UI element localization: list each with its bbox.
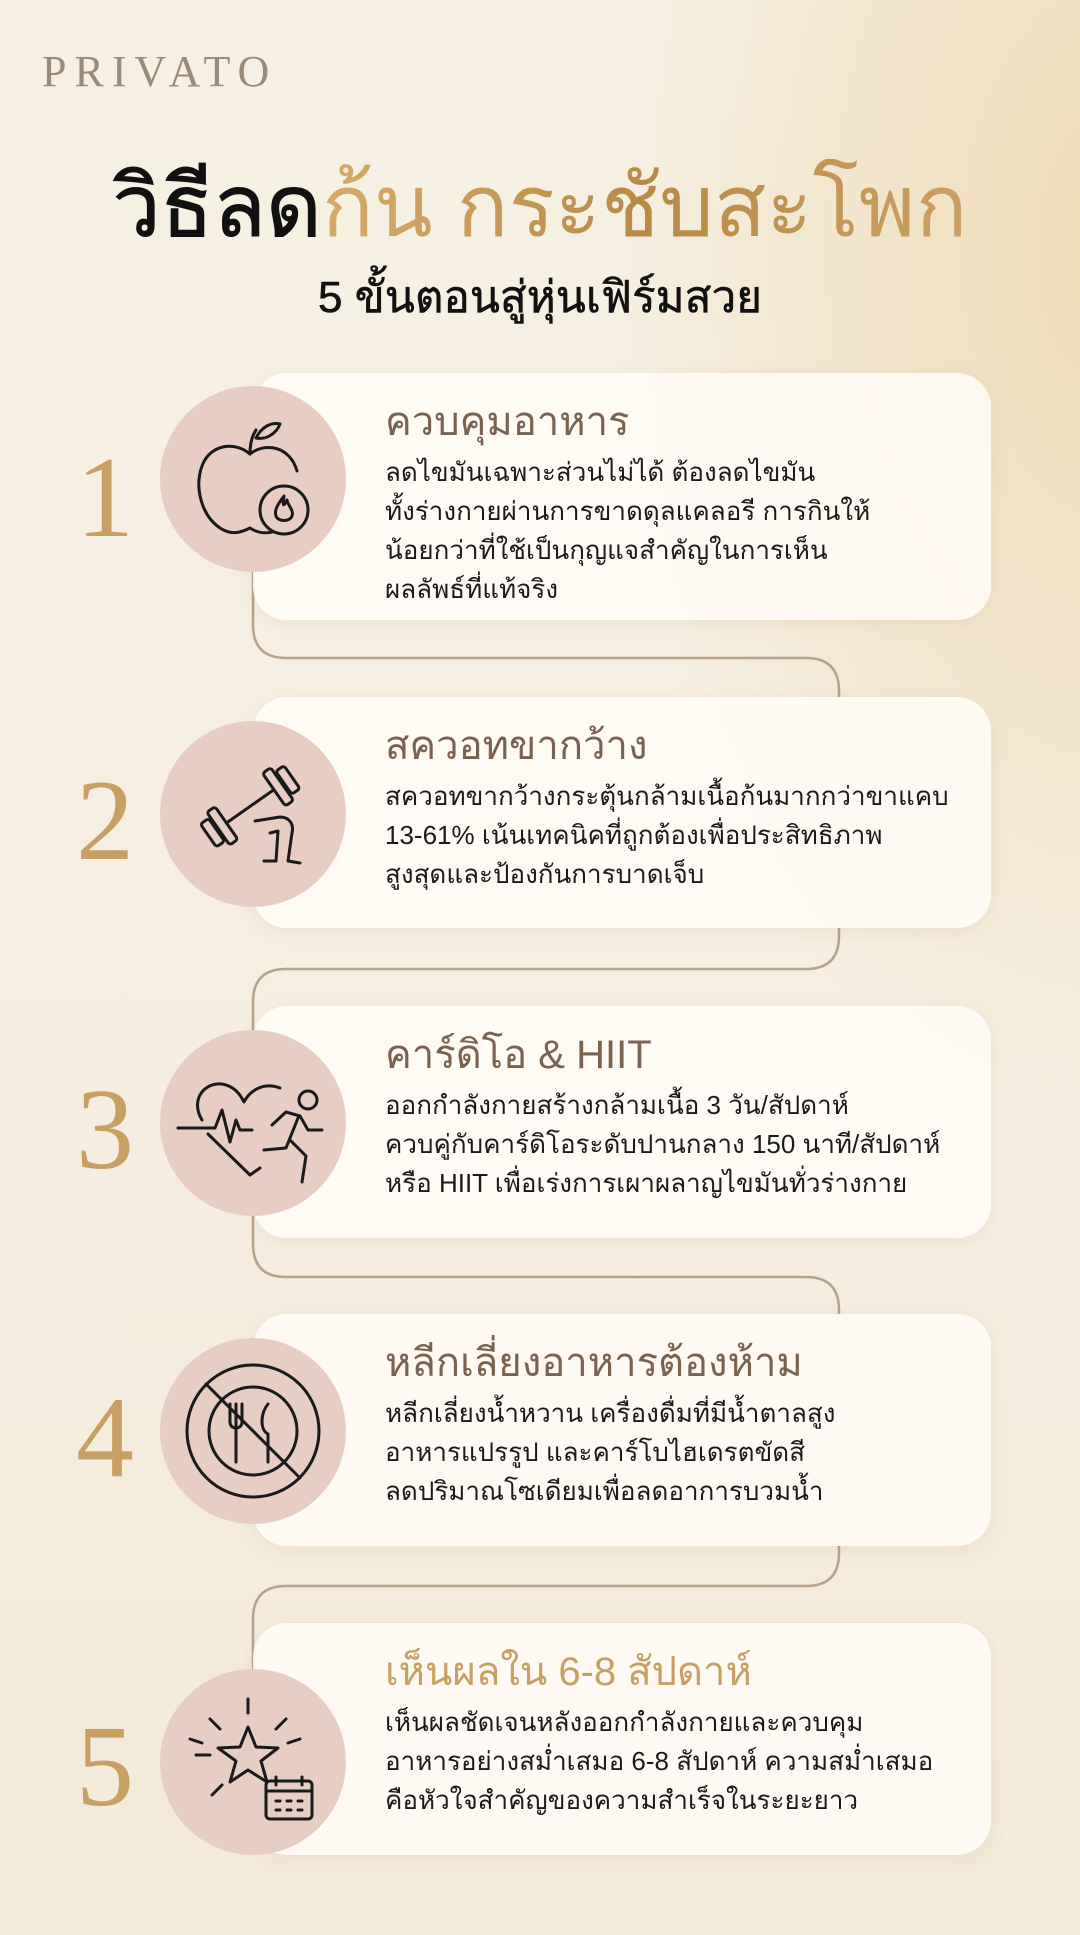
icon: heart with runner (160, 1030, 346, 1216)
panel: step 5: คือหัวใจสำคัญของความสำเร็จในระยะยาว (385, 1785, 858, 1815)
panel: step 1: ทั้งร่างกายผ่านการขาดดุลแคลอรี การกินให้ (385, 496, 870, 526)
panel: step 5: เห็นผลใน 6-8 สัปดาห์ (385, 1650, 752, 1694)
number 1: 1 (76, 434, 134, 562)
icon: apple with flame (160, 386, 346, 572)
panel: step 2 (253, 697, 991, 928)
panel: step 1: ลดไขมันเฉพาะส่วนไม่ได้ ต้องลดไขมัน (385, 457, 815, 487)
panel: step 4: หลีกเลี่ยงอาหารต้องห้าม (385, 1341, 803, 1385)
panel: step 3: คาร์ดิโอ & HIIT (385, 1033, 652, 1077)
panel: step 3: หรือ HIIT เพื่อเร่งการเผาผลาญไขมันทั่วร่างกาย (385, 1168, 907, 1198)
panel: step 4: อาหารแปรรูป และคาร์โบไฮเดรตขัดสี (385, 1437, 805, 1467)
panel: step 4: ลดปริมาณโซเดียมเพื่อลดอาการบวมน้ำ (385, 1476, 824, 1506)
panel: step 5: อาหารอย่างสม่ำเสมอ 6-8 สัปดาห์ ความสม่ำเสมอ (385, 1746, 933, 1776)
icon: dumbbell squat (160, 721, 346, 907)
icon: no food (160, 1338, 346, 1524)
panel: step 5: เห็นผลชัดเจนหลังออกกำลังกายและควบคุม (385, 1707, 863, 1737)
panel: step 3: ออกกำลังกายสร้างกล้ามเนื้อ 3 วัน/สัปดาห์ (385, 1090, 849, 1120)
panel: step 2: สูงสุดและป้องกันการบาดเจ็บ (385, 859, 704, 889)
panel: step 4 (253, 1314, 991, 1546)
brand logo: PRIVATO (42, 47, 277, 96)
panel: step 1 (253, 373, 991, 620)
panel: step 3: ควบคู่กับคาร์ดิโอระดับปานกลาง 150 นาที/สัปดาห์ (385, 1129, 940, 1159)
icon: star and calendar (160, 1669, 346, 1855)
panel: step 2: สควอทขากว้างกระตุ้นกล้ามเนื้อก้นมากกว่าขาแคบ (385, 781, 949, 811)
panel: step 1: ผลลัพธ์ที่แท้จริง (385, 574, 558, 604)
panel: step 1: น้อยกว่าที่ใช้เป็นกุญแจสำคัญในการเห็น (385, 535, 828, 565)
panel: step 2: สควอทขากว้าง (385, 724, 648, 768)
number 3: 3 (76, 1066, 134, 1194)
number 2: 2 (76, 757, 134, 885)
number 5: 5 (76, 1703, 134, 1831)
title: วิธีลดก้น กระชับสะโพก (112, 159, 968, 255)
number 4: 4 (76, 1374, 134, 1502)
panel: step 4: หลีกเลี่ยงน้ำหวาน เครื่องดื่มที่มีน้ำตาลสูง (385, 1398, 835, 1428)
panel: step 2: 13-61% เน้นเทคนิคที่ถูกต้องเพื่อประสิทธิภาพ (385, 820, 883, 850)
subtitle: 5 ขั้นตอนสู่หุ่นเฟิร์มสวย (318, 273, 762, 322)
panel: step 3 (253, 1006, 991, 1238)
panel: step 5 (253, 1623, 991, 1855)
panel: step 1: ควบคุมอาหาร (385, 400, 630, 444)
